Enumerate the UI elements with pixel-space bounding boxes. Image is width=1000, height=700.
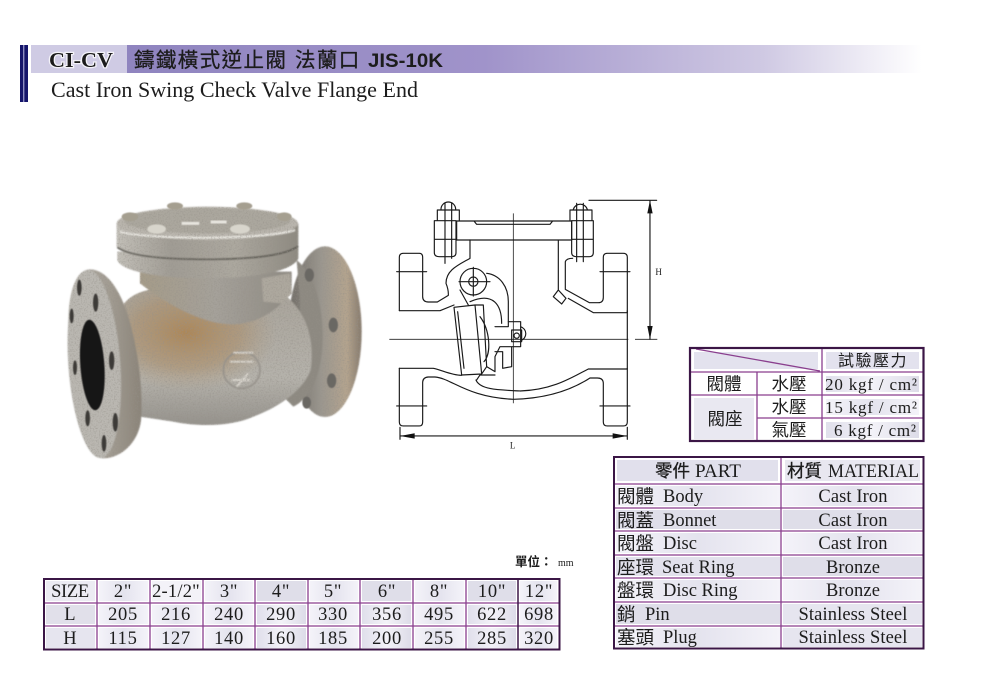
materials: Cast Iron xyxy=(818,487,888,507)
size row xyxy=(51,582,553,602)
part names: 閥盤 xyxy=(617,534,654,555)
H row: 115 xyxy=(108,629,138,649)
table: test pressure xyxy=(689,347,924,442)
centre lines xyxy=(389,213,657,403)
materials: Bronze xyxy=(826,558,880,578)
L row: 495 xyxy=(424,605,454,625)
header: product title: JIS-10K xyxy=(368,51,443,72)
technical drawing: valve cross-section xyxy=(389,200,662,451)
unit note: mm xyxy=(558,558,574,569)
part names: 塞頭 xyxy=(617,628,655,649)
parts header: 材質 xyxy=(787,461,822,481)
H row: 200 xyxy=(372,629,402,649)
part names: 座環 xyxy=(617,558,654,579)
table: dimensions by size xyxy=(43,578,560,650)
swing disc xyxy=(454,305,489,375)
dimension H: H xyxy=(655,267,662,277)
pressure rows: 6 kgf / cm² xyxy=(834,421,916,440)
part names: Disc xyxy=(663,534,697,554)
size row: 2" xyxy=(114,582,132,602)
size row: 10" xyxy=(478,582,506,602)
materials: Stainless Steel xyxy=(799,628,907,648)
part names: Seat Ring xyxy=(662,558,734,578)
part names: Bonnet xyxy=(663,511,717,531)
bonnet plate xyxy=(457,221,572,240)
size row: 8" xyxy=(430,582,448,602)
materials: Cast Iron xyxy=(818,534,888,554)
size row: 2-1/2" xyxy=(152,582,200,602)
product photo: cast iron swing check valve xyxy=(62,202,362,460)
materials: Cast Iron xyxy=(818,511,888,531)
part names: Pin xyxy=(645,605,670,625)
H row: 320 xyxy=(524,629,554,649)
part names: 盤環 xyxy=(617,581,654,602)
part names xyxy=(617,487,738,649)
parts header: MATERIAL xyxy=(828,462,919,482)
H row: 255 xyxy=(424,629,454,649)
materials: Stainless Steel xyxy=(799,605,907,625)
header: product title: Cast Iron Swing Check Valve Flange End xyxy=(51,77,418,102)
size row: 3" xyxy=(220,582,238,602)
header: product title: 法蘭口 xyxy=(295,49,361,72)
header: product title: CI-CV xyxy=(49,48,113,72)
size row: 4" xyxy=(272,582,290,602)
unit note xyxy=(515,554,574,569)
right flange xyxy=(283,246,362,417)
pressure rows: 閥座 xyxy=(708,409,742,429)
H row: 140 xyxy=(214,629,244,649)
materials xyxy=(799,487,907,648)
L row: 698 xyxy=(524,605,554,625)
part names: Body xyxy=(663,487,704,507)
dimension L: L xyxy=(510,441,515,451)
pressure header: 試驗壓力 xyxy=(838,352,908,370)
pressure rows xyxy=(706,374,917,440)
size row: 5" xyxy=(324,582,342,602)
H row: 185 xyxy=(318,629,348,649)
bonnet cover xyxy=(117,207,298,278)
right bolt xyxy=(570,203,593,262)
flanges and shell outline xyxy=(399,240,470,311)
L row: 216 xyxy=(161,605,191,625)
L row: 240 xyxy=(214,605,244,625)
H row: 160 xyxy=(266,629,296,649)
flange bolt holes and bore xyxy=(70,202,338,452)
parts header: PART xyxy=(695,462,741,482)
left flange face xyxy=(62,268,127,460)
size row: 12" xyxy=(525,582,553,602)
size row: 6" xyxy=(378,582,396,602)
part names: 銷 xyxy=(617,605,636,626)
H row: H xyxy=(63,629,77,649)
part names: Disc Ring xyxy=(663,581,738,601)
pressure rows: 水壓 xyxy=(772,397,806,417)
pressure rows: 閥體 xyxy=(706,374,742,394)
table: parts and materials xyxy=(613,456,924,649)
unit note: 單位： xyxy=(515,554,553,569)
L row xyxy=(64,605,554,625)
dimension L xyxy=(400,427,627,451)
parts header: 零件 xyxy=(655,461,690,481)
H row: 285 xyxy=(477,629,507,649)
left bolt xyxy=(434,202,459,263)
part names: 閥蓋 xyxy=(617,511,654,532)
part names: Plug xyxy=(663,628,697,648)
bonnet bolts xyxy=(122,202,292,234)
part names: 閥體 xyxy=(617,487,654,508)
header: product title xyxy=(20,45,922,102)
header: product title: 鑄鐵橫式逆止閥 xyxy=(134,49,287,72)
hinge and arm xyxy=(459,267,508,323)
L row: 622 xyxy=(477,605,507,625)
pressure rows: 15 kgf / cm² xyxy=(825,398,917,417)
L row: L xyxy=(64,605,76,625)
dimension H xyxy=(589,200,662,339)
pressure rows: 20 kgf / cm² xyxy=(825,375,917,394)
plug and disc nut xyxy=(477,322,526,380)
H row: 127 xyxy=(161,629,191,649)
left flange rim xyxy=(68,269,142,458)
L row: 205 xyxy=(108,605,138,625)
parts header xyxy=(655,461,919,482)
pressure rows: 氣壓 xyxy=(772,420,806,440)
materials: Bronze xyxy=(826,581,880,601)
L row: 356 xyxy=(372,605,402,625)
size row: SIZE xyxy=(51,582,89,602)
L row: 330 xyxy=(318,605,348,625)
L row: 290 xyxy=(266,605,296,625)
valve body xyxy=(124,289,312,425)
neck xyxy=(140,272,292,324)
body emblem xyxy=(223,352,260,388)
H row xyxy=(63,629,554,649)
pressure rows: 水壓 xyxy=(772,374,806,394)
